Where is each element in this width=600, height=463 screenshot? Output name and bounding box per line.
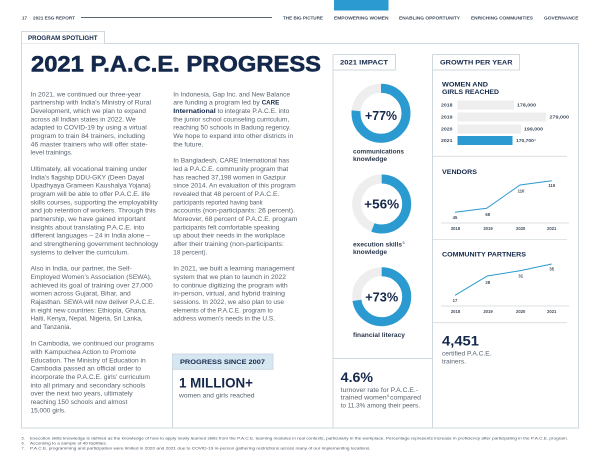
donut chart: +77% communications knowledge <box>353 88 406 163</box>
donut chart: +56% execution skills knowledge: knowledge <box>353 249 387 256</box>
line chart: vendors: 68 <box>485 212 491 217</box>
line chart: community partners: 2021 <box>547 309 557 314</box>
text block: middle column: participants reported having bank <box>173 199 263 206</box>
text block: left column: skills courses, supporting the employability <box>30 199 158 206</box>
text block: left column: program to train 84 trainers, including <box>30 133 145 140</box>
text block: left column: partnership with India’s Ministry of Rural <box>30 100 152 107</box>
text block: left column: and strengthening government technology <box>30 241 159 248</box>
text block: middle column: system that we plan to launch in 2022 <box>173 274 286 281</box>
text block: middle column: to continue digitizing the program with <box>173 282 288 289</box>
text block: middle column: Moreover, 68 percent of P.A.C.E. program <box>173 216 298 223</box>
text block: left column: in eight new countries: Ethiopia, Ghana, <box>30 307 147 314</box>
line chart: community partners: 31 <box>518 274 524 278</box>
text block: middle column: since 2014. An evaluation of this program <box>173 183 296 190</box>
text block: middle column: the future. <box>173 141 203 148</box>
bar chart: women and girls reached: 2018 <box>441 102 453 108</box>
text block: left column: Employed Women’s Association (SEWA), <box>30 274 152 281</box>
text block: middle column: to integrate P.A.C.E. into <box>218 108 290 115</box>
stat: 4.6% turnover: trained women <box>341 394 387 401</box>
text block: left column: insights about translating P.A.C.E. into <box>30 224 145 231</box>
callout: progress since 2007: women and girls reached <box>178 392 255 399</box>
heading: growth per year: GROWTH PER YEAR <box>440 60 513 66</box>
text block: middle column: In Indonesia, Gap Inc. and New Balance <box>173 91 290 98</box>
text block: left column: with Kampuchea Action to Promote <box>29 349 136 356</box>
tab: program spotlight: PROGRAM SPOTLIGHT <box>28 35 98 42</box>
stat: 4,451 certified trainers: certified P.A.C.E. <box>442 350 492 357</box>
text block: middle column: In Bangladesh, CARE International has <box>173 158 290 165</box>
text block: left column: level trainings. <box>30 150 73 157</box>
donut chart: +73% financial literacy <box>353 272 407 339</box>
donut chart: +73% financial literacy: financial literacy <box>353 332 405 339</box>
heading: 2021 impact: 2021 IMPACT <box>340 60 388 66</box>
header navigation: ENRICHING COMMUNITIES <box>471 15 533 20</box>
line chart: community partners: COMMUNITY PARTNERS <box>442 252 526 258</box>
text block: left column: different languages – 24 in India alone – <box>30 233 150 240</box>
text block: middle column: address women’s needs in the U.S. <box>173 316 275 323</box>
line chart: vendors: 2020 <box>516 226 526 231</box>
text block: middle column: has reached 37,198 women in Gazipur <box>173 174 287 181</box>
bar chart: women and girls reached <box>441 82 570 145</box>
panel: program spotlight frame <box>22 32 578 428</box>
text block: middle column: In 2021, we built a learning management <box>173 266 295 273</box>
header navigation: GOVERNANCE <box>544 15 579 20</box>
text block: left column: achieved its goal of training over 27,000 <box>30 282 153 289</box>
footnotes <box>22 435 568 450</box>
footnotes: P.A.C.E. programming and participation were limited in 2020 and 2021 due to COVID-19 in-person gathering restrictions across many of our implementing locations. <box>30 445 371 450</box>
text block: left column: Haiti, Kenya, Nepal, Nigeria, Sri Lanka, <box>30 316 143 323</box>
line chart: community partners <box>441 252 569 314</box>
text block: left column: 46 master trainers who will offer state- <box>30 141 148 148</box>
line chart: vendors: 119 <box>548 183 556 188</box>
line chart: vendors: 110 <box>518 188 525 194</box>
bar chart: women and girls reached: WOMEN AND <box>442 82 489 88</box>
text block: middle column: accounts (non-participants: 26 percent). <box>173 208 295 215</box>
text block: left column: 15,000 girls. <box>30 407 66 414</box>
header navigation: 17 <box>22 15 28 20</box>
text block: middle column: reaching 50 schools in Badung regency. <box>173 125 291 132</box>
bar chart: women and girls reached: 2021 <box>441 138 453 143</box>
text block: left column: reaching 150 schools and almost <box>30 399 127 406</box>
header navigation: ENABLING OPPORTUNITY <box>399 15 460 20</box>
text block: left column: In 2021, we continued our three-year <box>30 91 141 98</box>
text block: left column: Cambodia passed an official order to <box>30 366 141 373</box>
text block: left column <box>29 91 159 414</box>
footnotes: According to a sample of 40 facilities. <box>30 440 107 445</box>
callout: progress since 2007: PROGRESS SINCE 2007 <box>180 359 266 366</box>
text block: left column: and Tanzania. <box>30 324 71 331</box>
donut chart: +77% communications knowledge: knowledge <box>353 156 387 163</box>
text block: left column: across all Indian states in 2022. We <box>30 116 136 123</box>
stat: 4,451 certified trainers: 4,451 <box>442 334 480 349</box>
bar chart: women and girls reached: 199,000 <box>524 126 544 131</box>
line chart: vendors <box>441 169 569 231</box>
text block: left column: women across Gujarat, Bihar, and <box>30 291 131 298</box>
stat: 4.6% turnover: turnover rate for P.A.C.E.- <box>341 387 418 394</box>
text block: middle column: International <box>173 108 216 115</box>
stat: 4.6% turnover <box>341 370 421 409</box>
dividers <box>433 156 567 323</box>
text block: middle column: elements of the P.A.C.E. program to <box>173 307 273 314</box>
callout: progress since 2007: 1 MILLION+ <box>179 375 253 391</box>
text block: left column: Ultimately, all vocational training under <box>30 166 148 173</box>
bar chart: women and girls reached: 170,700⁷ <box>516 138 536 143</box>
text block: middle column: We hope to expand into other districts in <box>173 133 294 140</box>
text block: left column: In Cambodia, we continued our programs <box>30 341 155 348</box>
text block: middle column: 18 percent). <box>173 249 207 256</box>
bar chart: women and girls reached: 2019 <box>441 114 453 119</box>
donut chart: +56% execution skills knowledge: execution skills <box>353 241 402 248</box>
header navigation: 2021 ESG REPORT <box>33 15 75 20</box>
text block: middle column: are funding a program led by <box>173 100 260 107</box>
text block: middle column: up about their needs in the workplace <box>173 233 285 240</box>
line chart: community partners: 17 <box>453 298 458 303</box>
text block: middle column: in-person, virtual, and hybrid training <box>173 291 285 298</box>
donut chart: +56% execution skills knowledge: +56% <box>364 197 400 212</box>
text block: left column: incorporate the P.A.C.E. girls’ curriculum <box>30 374 150 381</box>
bar chart: women and girls reached: GIRLS REACHED <box>442 89 500 96</box>
text block: left column: Upadhyaya Grameen Kaushalya Yojana) <box>30 183 151 190</box>
bar chart: women and girls reached: 279,000 <box>550 114 570 119</box>
text block: middle column: the junior school counseling curriculum, <box>173 116 289 123</box>
line chart: community partners: 2020 <box>516 309 526 314</box>
text block: left column: Also in India, our partner, the Self- <box>30 266 132 273</box>
line chart: vendors: 45 <box>453 215 458 220</box>
line chart: community partners: 2019 <box>483 309 493 314</box>
footnotes: 7. <box>22 445 25 450</box>
stat: 4.6% turnover: 6 <box>387 394 389 398</box>
line chart: vendors: 2021 <box>547 226 557 231</box>
text block: middle column: participants felt comfortable speaking <box>173 224 280 231</box>
line chart: community partners: 28 <box>485 280 491 285</box>
stat: 4,451 certified trainers <box>442 334 492 365</box>
text block: left column: program will be able to offer P.A.C.E. life <box>30 191 150 198</box>
text block: left column: partnership, we have gained important <box>30 216 146 223</box>
stat: 4.6% turnover: 4.6% <box>341 370 373 385</box>
text block: middle column <box>173 91 298 323</box>
text block: left column: India’s flagship DDU-GKY (Deen Dayal <box>30 174 145 181</box>
text block: middle column: led a P.A.C.E. community program that <box>173 166 288 173</box>
footnotes: 5. <box>22 435 25 440</box>
donut chart: +73% financial literacy: +73% <box>365 289 399 304</box>
text block: left column: over the next two years, ultimately <box>30 391 133 398</box>
text block: left column: into all primary and secondary schools <box>30 382 146 389</box>
header navigation <box>22 0 579 20</box>
text block: left column: adapted to COVID-19 by using a virtual <box>30 125 147 132</box>
text block: middle column: revealed that 48 percent of P.A.C.E. <box>173 191 279 198</box>
stat: 4.6% turnover: compared <box>390 394 421 401</box>
stat: 4,451 certified trainers: trainers. <box>442 358 466 365</box>
donut chart: +77% communications knowledge: +77% <box>365 108 397 123</box>
bar chart: women and girls reached: 2020 <box>441 126 453 131</box>
line chart: vendors: 2018 <box>451 226 461 231</box>
text block: left column: systems to deliver the curriculum. <box>30 249 129 256</box>
title: 2021 P.A.C.E. PROGRESS <box>31 52 321 77</box>
stat: 4.6% turnover: to 11.3% among their peers. <box>341 402 420 409</box>
text block: left column: Rajasthan. SEWA will now deliver P.A.C.E. <box>30 299 154 306</box>
text block: middle column: CARE <box>262 100 280 107</box>
footnotes: 6. <box>22 440 25 445</box>
text block: middle column: after their training (non-participants: <box>173 241 284 248</box>
text block: left column: Development, which we plan to expand <box>30 108 146 115</box>
donut chart: +77% communications knowledge: communications <box>353 148 404 155</box>
callout: progress since 2007 <box>172 354 273 399</box>
donut chart: +56% execution skills knowledge: 5 <box>402 241 405 245</box>
text block: middle column: sessions. In 2022, we also plan to use <box>173 299 284 306</box>
line chart: vendors: 2019 <box>483 226 493 231</box>
text block: left column: and job retention of workers. Through this <box>30 208 156 215</box>
header navigation: EMPOWERING WOMEN <box>334 15 388 20</box>
bar chart: women and girls reached: 178,000 <box>517 102 537 108</box>
line chart: community partners: 2018 <box>451 309 461 314</box>
donut chart: +56% execution skills knowledge <box>353 179 407 256</box>
text block: left column: Education. The Ministry of Education in <box>30 357 146 364</box>
header navigation: THE BIG PICTURE <box>283 15 323 20</box>
line chart: vendors: VENDORS <box>442 169 477 176</box>
line chart: community partners: 35 <box>549 266 555 272</box>
footnotes: Execution skills knowledge is defined as the knowledge of how to apply newly learned skills from the P.A.C.E. learning modules in real contexts, particularly in the workplace. Percentage represents increase in proficiency after participating in the P.A.C.E. program. <box>30 435 568 440</box>
